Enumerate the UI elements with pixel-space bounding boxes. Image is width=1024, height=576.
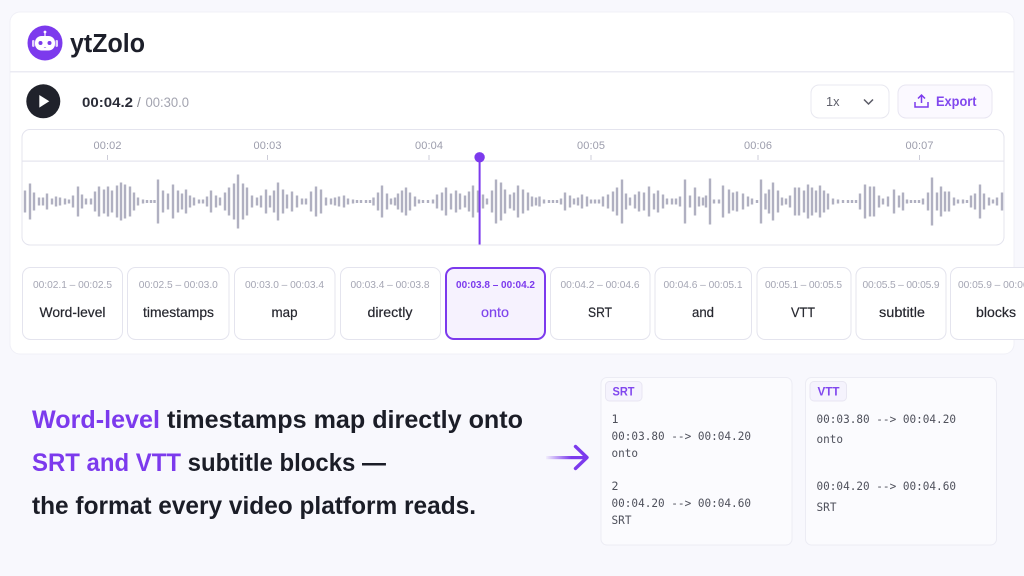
- SRT cues: 00:03.80 --> 00:04.20: [612, 429, 751, 443]
- export button: [898, 85, 992, 118]
- VTT cues: 00:03.80 --> 00:04.20: [816, 412, 956, 426]
- VTT cues: [816, 412, 956, 514]
- time ruler: 00:07: [906, 140, 934, 152]
- chip: blocks: [950, 268, 1024, 340]
- chip: SRT: [550, 268, 650, 340]
- chip: VTT: [757, 268, 851, 340]
- headline: Word-level timestamps map directly onto: [32, 406, 523, 434]
- time ruler: [94, 140, 934, 160]
- chip: timestamps: [128, 268, 229, 340]
- chip: VTT: VTT: [791, 304, 815, 320]
- chip: directly: [340, 268, 440, 340]
- badge: SRT: SRT: [612, 386, 634, 398]
- arrow: [546, 446, 587, 468]
- panel: app window: [10, 12, 1024, 354]
- panel: VTT: [806, 378, 996, 545]
- chip: timestamps: timestamps: [143, 304, 214, 320]
- waveform bars: [25, 174, 1002, 228]
- speed dropdown: 1x: [826, 94, 840, 109]
- chip: subtitle: [856, 268, 946, 340]
- icon: robot: [28, 26, 62, 60]
- SRT cues: SRT: [612, 513, 632, 527]
- chip: onto (active): onto: [481, 304, 509, 320]
- chip: subtitle: 00:05.5 – 00:05.9: [862, 280, 940, 291]
- headline: [32, 406, 523, 520]
- word chips: [22, 268, 1024, 340]
- SRT cues: 00:04.20 --> 00:04.60: [612, 496, 751, 510]
- chip: and: and: [692, 304, 714, 320]
- time readout: /: [137, 95, 141, 110]
- time ruler: 00:06: [744, 140, 772, 152]
- chip: subtitle: subtitle: [879, 304, 925, 320]
- panel: SRT: [601, 378, 792, 545]
- VTT cues: onto: [816, 432, 843, 446]
- chip: timestamps: 00:02.5 – 00:03.0: [139, 280, 218, 291]
- chip: SRT: SRT: [588, 304, 612, 320]
- chip: and: [655, 268, 752, 340]
- chip: directly: directly: [368, 304, 412, 320]
- waveform timeline: [22, 130, 1004, 245]
- time ruler: 00:02: [94, 140, 122, 152]
- chip: SRT: 00:04.2 – 00:04.6: [560, 280, 640, 291]
- SRT cues: 1: [612, 412, 618, 426]
- chip: directly: 00:03.4 – 00:03.8: [350, 280, 430, 291]
- export button: Export: [936, 94, 977, 109]
- speed dropdown: [811, 85, 889, 118]
- chip: VTT: 00:05.1 – 00:05.5: [765, 280, 842, 291]
- chip: Word-level: [22, 268, 122, 340]
- chip: blocks: blocks: [976, 304, 1016, 320]
- chip: and: 00:04.6 – 00:05.1: [664, 280, 743, 291]
- time readout: 00:30.0: [146, 95, 189, 110]
- badge: VTT: VTT: [818, 386, 840, 398]
- wordmark: ytZolo: [70, 30, 145, 58]
- time readout: 00:04.2: [82, 94, 133, 110]
- chip: map: map: [272, 304, 298, 320]
- headline: SRT and VTT subtitle blocks —: [32, 449, 386, 477]
- chip: onto (active): 00:03.8 – 00:04.2: [456, 280, 535, 291]
- logo: [28, 26, 145, 60]
- SRT cues: onto: [612, 446, 638, 460]
- VTT cues: SRT: [816, 500, 837, 514]
- time ruler: 00:05: [577, 140, 605, 152]
- icon: upload: [915, 95, 928, 107]
- time ruler: 00:04: [415, 140, 443, 152]
- chip: map: 00:03.0 – 00:03.4: [245, 280, 324, 291]
- VTT cues: 00:04.20 --> 00:04.60: [816, 479, 956, 493]
- badge: SRT: [606, 382, 642, 401]
- SRT cues: [612, 412, 751, 527]
- SRT cues: 2: [612, 479, 618, 493]
- time ruler: 00:03: [254, 140, 282, 152]
- icon: play button: [26, 84, 60, 118]
- chip: map: [234, 268, 335, 340]
- chip: Word-level: Word-level: [40, 304, 106, 320]
- badge: VTT: [810, 382, 846, 401]
- headline: the format every video platform reads.: [32, 492, 476, 520]
- chip: Word-level: 00:02.1 – 00:02.5: [33, 280, 112, 291]
- chip: onto (active): [446, 268, 545, 339]
- playhead: [474, 152, 485, 244]
